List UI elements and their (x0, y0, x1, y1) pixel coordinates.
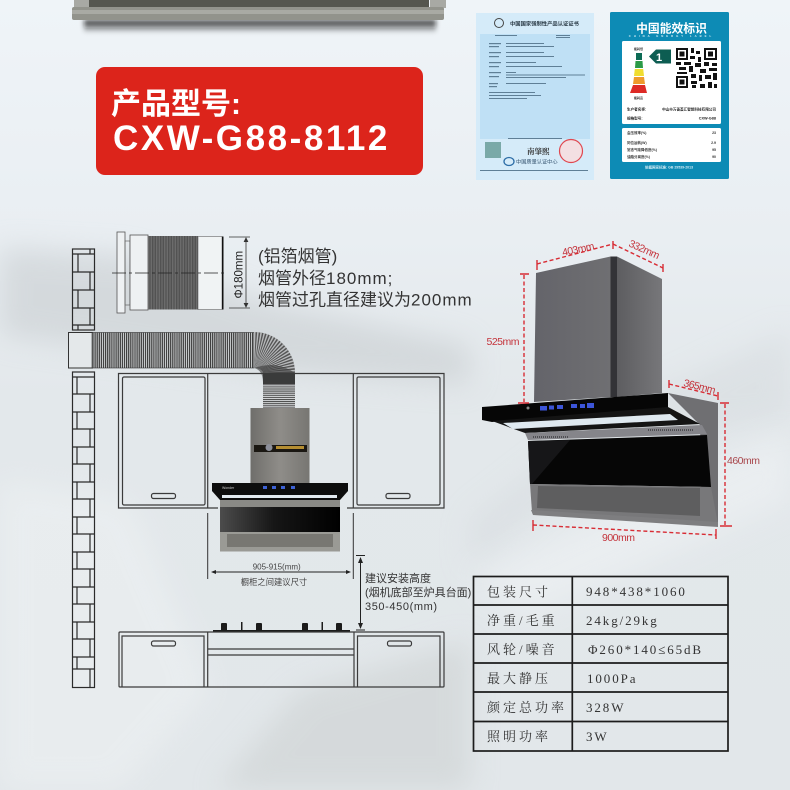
touch panel (540, 403, 594, 410)
model number badge (96, 67, 423, 175)
duct notes (258, 247, 473, 310)
gas stove (213, 622, 350, 632)
lower cabinets (119, 632, 444, 687)
CQC logo (504, 158, 514, 166)
duct installed (68, 332, 295, 408)
dimension labels: 365mm (682, 377, 717, 397)
table labels (487, 584, 567, 744)
table labels: 照明功率 (487, 729, 551, 744)
dimension labels: 460mm (727, 455, 760, 467)
dimension labels: 332mm (627, 238, 662, 262)
cabinet gap dimension (208, 513, 353, 587)
certificate seal (560, 140, 582, 162)
table values: 1000Pa (587, 671, 637, 686)
certificate body lines (480, 35, 588, 171)
energy label lower card (622, 128, 721, 162)
table labels: 颜定总功率 (487, 700, 567, 715)
label model: 规格型号: (627, 116, 643, 120)
duct notes: (铝箔烟管) (258, 247, 337, 266)
dimension labels: 403mm (561, 240, 596, 259)
table labels: 最大静压 (487, 671, 551, 686)
upper cabinets (118, 374, 444, 508)
gap size: 905-915(mm) (253, 562, 301, 572)
label data rows: 油脂分离度(%) (627, 154, 650, 159)
glass panel (528, 435, 711, 487)
certificate logo (494, 18, 504, 28)
chimney (534, 256, 610, 402)
canopy (482, 393, 668, 422)
product photo bottom edge (72, 0, 446, 33)
dimension labels: 525mm (486, 336, 520, 348)
install height note (365, 571, 471, 613)
energy label english: CHINA ENERGY LABEL (629, 34, 714, 38)
installed hood (212, 408, 348, 552)
product hood render (482, 256, 718, 527)
badge label: 产品型号: (111, 88, 241, 121)
grade pyramid: 能耗高 (634, 95, 643, 100)
duct detail diagram (112, 232, 250, 313)
diameter label: Φ180mm (234, 251, 246, 298)
label data rows (627, 130, 716, 159)
grade marker (649, 50, 671, 64)
specification table (474, 576, 728, 751)
energy label upper card (622, 41, 721, 124)
grade pyramid: 能耗低 (634, 46, 643, 51)
China energy label: 中山市万善荟汇智能科技有限公司 (662, 106, 716, 112)
QR code (676, 48, 717, 88)
dimension labels (486, 238, 760, 544)
label manufacturer: 生产者名称: (627, 106, 646, 112)
label standard: 依据国家标准: GB 29539-2013 (645, 164, 693, 170)
installed hood: Wonder (222, 486, 235, 490)
label data rows: 会压效率(%) (627, 130, 646, 135)
table values: 948*438*1060 (586, 584, 687, 599)
certificate title: 中国国家强制性产品认证证书 (510, 20, 580, 28)
gap caption: 橱柜之间建议尺寸 (241, 577, 307, 587)
control panel (263, 486, 295, 489)
China energy label (610, 12, 729, 179)
certificate QR (485, 142, 501, 158)
centre line (112, 272, 226, 274)
CCC certificate (476, 13, 594, 180)
label data rows: 23 (712, 131, 716, 135)
duct notes: 烟管外径180mm; (258, 269, 393, 288)
product dimensions (518, 241, 732, 539)
table values: Φ260*140≤65dB (588, 642, 703, 657)
hood badge (254, 444, 307, 452)
lower cavity (530, 484, 718, 524)
install height note: 350-450(mm) (365, 601, 438, 613)
table values (586, 584, 703, 744)
grade marker: 1 (656, 52, 662, 64)
certificate signature: 南肇熙 (527, 146, 550, 156)
certification center: 中国质量认证中心 (516, 158, 558, 166)
label data rows: 90 (712, 155, 716, 159)
duct elbow (254, 332, 295, 373)
duct notes: 烟管过孔直径建议为200mm (258, 290, 473, 310)
badge model: CXW-G88-8112 (113, 119, 390, 158)
vent strip (525, 425, 707, 440)
label data rows: 同位运转(W) (627, 140, 647, 145)
install height dimension (356, 556, 471, 630)
label data rows: 常态气味降低度(%) (627, 147, 657, 152)
dimension labels: 900mm (602, 532, 635, 544)
table values: 3W (586, 729, 609, 744)
label data rows: 95 (712, 148, 716, 152)
install height note: 建议安装高度 (365, 571, 431, 585)
table values: 24kg/29kg (586, 613, 659, 628)
diameter dimension (229, 237, 250, 308)
install height note: (烟机底部至炉具台面) (365, 585, 471, 599)
side panel (668, 393, 718, 522)
table labels: 风轮/噪音 (487, 642, 558, 657)
table values: 328W (586, 700, 625, 715)
grade pyramid (630, 46, 647, 100)
table labels: 净重/毛重 (487, 613, 558, 628)
energy label title: 中国能效标识 (636, 22, 707, 36)
brick wall (72, 249, 94, 688)
China energy label: CXW-G88 (699, 116, 716, 120)
label data rows: 2.9 (711, 141, 716, 145)
table labels: 包装尺寸 (487, 584, 551, 600)
